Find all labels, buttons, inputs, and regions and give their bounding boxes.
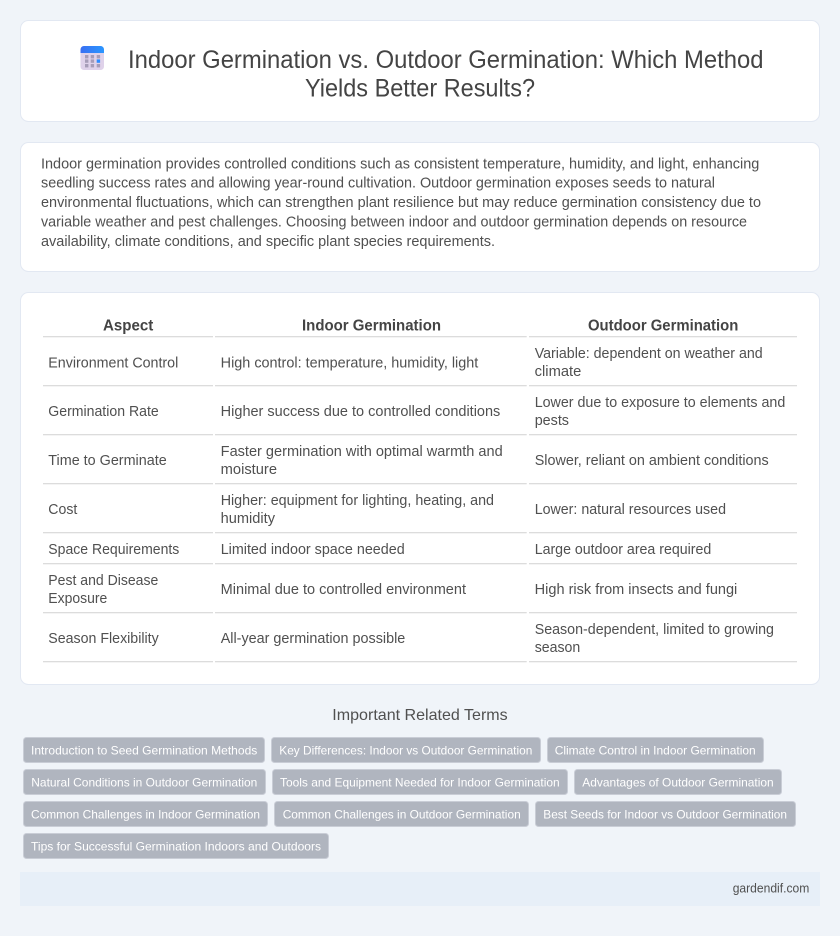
row: time to germinate: moisture [221,462,277,478]
table header row: Indoor Germination [302,318,441,335]
tag [274,802,528,826]
row: season flexibility: season [535,640,580,656]
text block: introduction paragraph [41,156,761,250]
tag [548,738,764,762]
tag [24,834,328,858]
tag [272,738,540,762]
row: time to germinate: Faster germination with optimal warmth and [221,444,503,460]
row: cost: Lower: natural resources used [535,502,726,518]
row: cost [43,493,797,533]
title: Yields Better Results? [305,74,535,102]
text block: introduction paragraph: availability, climate conditions, and specific plant species requirements. [41,234,495,250]
row: time to germinate: Slower, reliant on ambient conditions [535,453,769,469]
heading: important related terms: Important Related Terms [332,707,508,724]
row: environment control: High control: temperature, humidity, light [221,355,478,371]
row: germination rate: Lower due to exposure to elements and [535,395,785,411]
title [128,46,764,102]
panel: comparison table [20,292,820,684]
row: space requirements: Space Requirements [48,542,179,558]
row: time to germinate [43,444,797,484]
row: germination rate: Germination Rate [48,404,159,420]
panel: related term tags [24,738,796,858]
table header row: Outdoor Germination [588,318,738,335]
row: pest and disease exposure: Minimal due to controlled environment [221,582,466,598]
tag [272,770,568,794]
tag [24,738,264,762]
row: cost: humidity [221,511,276,527]
row: season flexibility [43,622,797,662]
row: season flexibility: Season-dependent, limited to growing [535,622,774,638]
row: environment control [43,346,797,386]
row: cost: Cost [48,502,77,518]
footer: gardendif.com [733,882,809,896]
tag: Tips for Successful Germination Indoors and Outdoors [31,840,321,854]
table header row [43,318,797,337]
tag: Best Seeds for Indoor vs Outdoor Germination [543,808,787,822]
row: pest and disease exposure [43,573,797,613]
tag: Advantages of Outdoor Germination [582,776,774,790]
text block: introduction paragraph: Indoor germination provides controlled conditions such as consistent temperature, humidity, and light, enhancing [41,156,759,172]
row: time to germinate: Time to Germinate [48,453,167,469]
tag: Common Challenges in Indoor Germination [31,808,260,822]
tag: Introduction to Seed Germination Methods [31,743,257,757]
tag: Key Differences: Indoor vs Outdoor Germination [279,743,532,757]
text block: introduction paragraph: environmental fluctuations, which can strengthen plant resilience but may reduce germination consistency due to [41,195,761,211]
row: pest and disease exposure: Pest and Disease [48,573,158,589]
tag [574,770,782,794]
text block: introduction paragraph: variable weather and pest challenges. Choosing between indoor and outdoor germination depends on resource [41,215,747,231]
tag: Natural Conditions in Outdoor Germination [31,776,257,790]
tag: Climate Control in Indoor Germination [555,743,756,757]
row: space requirements: Large outdoor area required [535,542,711,558]
tag [536,802,796,826]
row: germination rate: Higher success due to controlled conditions [221,404,500,420]
tag [24,770,266,794]
row: environment control: climate [535,364,581,380]
row: germination rate: pests [535,413,569,429]
title: Indoor Germination vs. Outdoor Germination: Which Method [128,46,764,74]
table header row: Aspect [103,318,153,335]
row: pest and disease exposure: Exposure [48,591,107,607]
row: environment control: Environment Control [48,355,178,371]
row: pest and disease exposure: High risk from insects and fungi [535,582,737,598]
row: cost: Higher: equipment for lighting, heating, and [221,493,494,509]
tag: Tools and Equipment Needed for Indoor Germination [280,776,560,790]
tag: Common Challenges in Outdoor Germination [283,808,521,822]
tag [24,802,268,826]
text block: introduction paragraph: seedling success rates and allowing year-round cultivation. Outdoor germination exposes seeds to natural [41,176,715,192]
row: space requirements: Limited indoor space needed [221,542,405,558]
panel: header [20,20,820,122]
row: space requirements [43,542,797,564]
row: environment control: Variable: dependent on weather and [535,346,763,362]
row: season flexibility: All-year germination possible [221,631,405,647]
row: germination rate [43,395,797,435]
row: season flexibility: Season Flexibility [48,631,159,647]
icon: calendar [80,46,104,70]
footer [20,872,820,906]
panel: introduction [20,142,820,272]
